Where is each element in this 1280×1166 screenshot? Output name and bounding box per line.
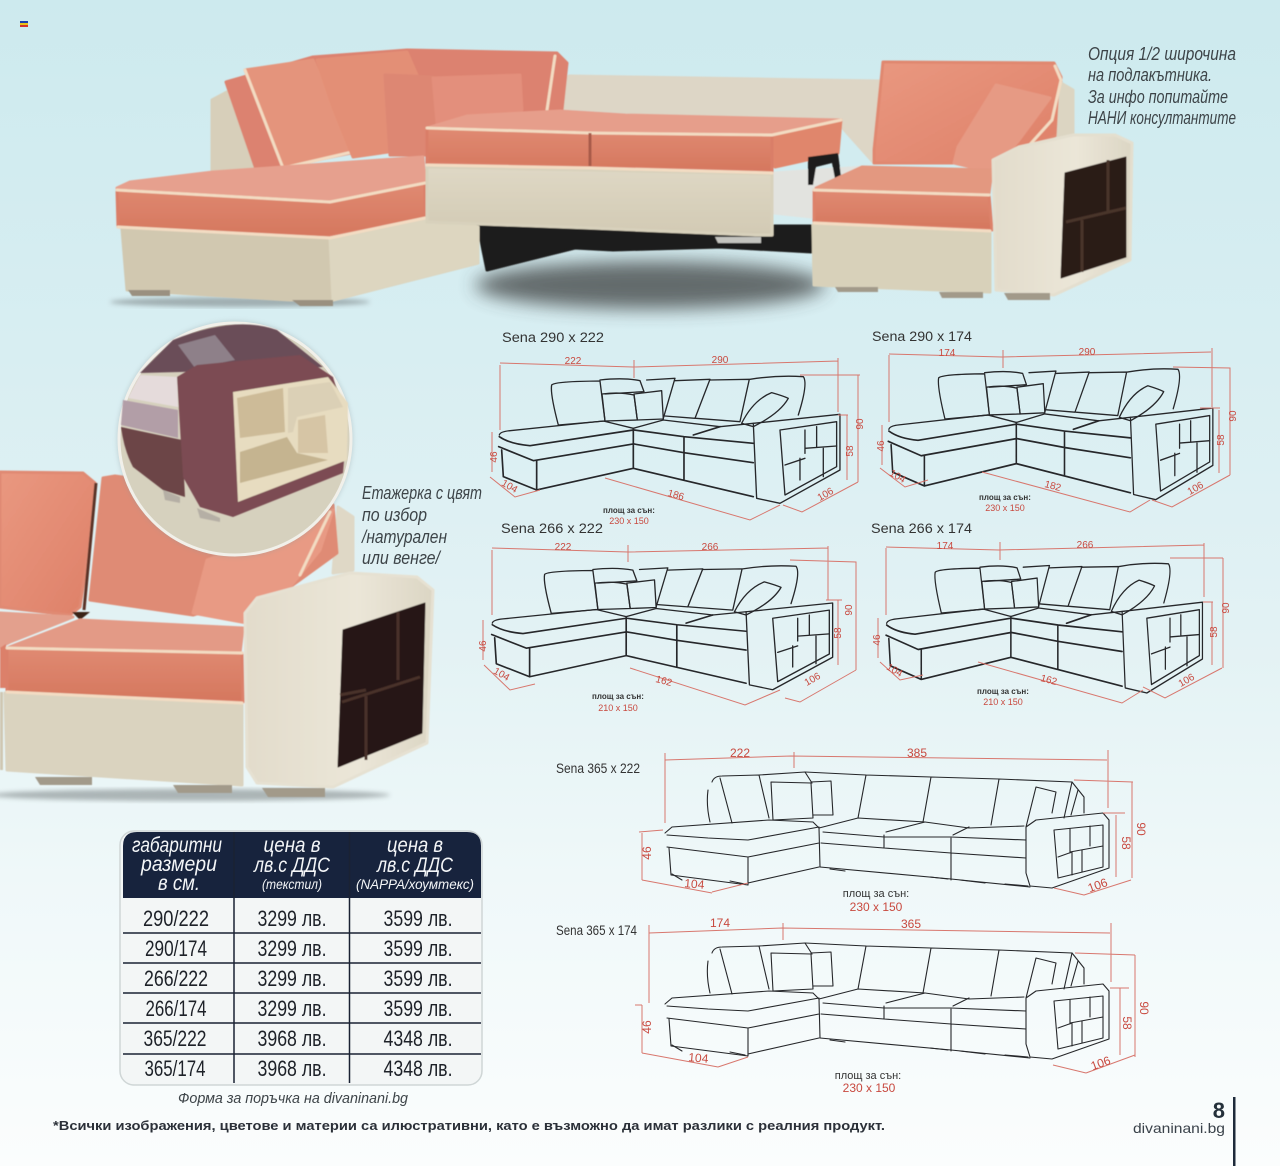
page marker bar (1233, 1097, 1236, 1166)
table header (123, 832, 481, 898)
diagram: Sena 365 x 174: 104 (688, 1050, 709, 1066)
diagram: Sena 266 x 174: 106 (1177, 672, 1197, 690)
diagram: Sena 266 x 174: Sena 266 x 174 (871, 521, 973, 536)
diagram: Sena 290 x 222: 230 x 150 (609, 516, 649, 526)
table header: (NAPPA/хоумтекс) (356, 876, 474, 892)
callout: shelf colour: Етажерка с цвят (362, 483, 482, 503)
diagram: Sena 365 x 222 (556, 746, 1148, 914)
inset circle: shelf colour detail (117, 321, 353, 557)
table rows: 266/174 (146, 996, 206, 1021)
table rows: 3299 лв. (258, 936, 326, 961)
diagram: Sena 290 x 174: Sena 290 x 174 (872, 329, 973, 344)
diagram: Sena 365 x 174: 58 (1120, 1016, 1134, 1030)
callout: armrest width option (1088, 44, 1236, 128)
diagram: Sena 290 x 174: 230 x 150 (985, 503, 1025, 513)
diagram: Sena 365 x 222: 90 (1134, 822, 1148, 836)
callout: armrest width option: НАНИ консултантите (1088, 108, 1236, 128)
diagram: Sena 290 x 222: площ за сън: (603, 506, 655, 515)
callout: shelf colour: по избор (362, 505, 427, 525)
diagram: Sena 290 x 174: 58 (1216, 434, 1227, 446)
diagram: Sena 365 x 174: 230 x 150 (843, 1081, 896, 1095)
diagram: Sena 365 x 174: площ за сън: (835, 1070, 901, 1082)
diagram: Sena 266 x 174: 90 (1221, 602, 1232, 614)
diagram: Sena 290 x 222: 58 (845, 445, 856, 457)
diagram: Sena 365 x 222: 46 (640, 846, 654, 860)
diagram: Sena 365 x 174: Sena 365 x 174 (556, 922, 637, 938)
diagram: Sena 365 x 174 (556, 916, 1151, 1095)
diagram: Sena 290 x 174: 174 (939, 348, 956, 359)
table header: лв.с ДДС (253, 854, 331, 877)
diagram: Sena 365 x 174: 174 (710, 916, 730, 930)
order form note: Форма за поръчка на divaninani.bg (178, 1090, 409, 1107)
callout: armrest width option: За инфо попитайте (1088, 87, 1228, 107)
diagram: Sena 266 x 222: 58 (833, 627, 844, 639)
table rows: 290/222 (143, 906, 209, 931)
diagram: Sena 365 x 222: площ за сън: (843, 888, 909, 900)
price table (120, 831, 482, 1085)
table header: габаритни (132, 834, 222, 857)
table header: (текстил) (262, 876, 322, 892)
table rows: 3599 лв. (384, 906, 452, 931)
table rows: 3299 лв. (258, 906, 326, 931)
diagram: Sena 290 x 174 (872, 329, 1239, 513)
footnote: *Всички изображения, цветове и материи са илюстративни, като е възможно да имат разлики с реалния продукт. (53, 1118, 885, 1133)
diagram: Sena 290 x 222: 106 (816, 486, 836, 504)
diagram: Sena 266 x 222 (478, 521, 856, 713)
table rows: 3968 лв. (258, 1026, 326, 1051)
diagram: Sena 365 x 222: 222 (730, 746, 750, 760)
diagram: Sena 365 x 174: 90 (1137, 1001, 1151, 1015)
table rows: 266/222 (144, 966, 208, 991)
table header: цена в (264, 834, 321, 857)
table rows: 3299 лв. (258, 996, 326, 1021)
callout: shelf colour: /натурален (360, 527, 447, 547)
table rows: 3599 лв. (384, 966, 452, 991)
website: divaninani.bg (1133, 1120, 1225, 1136)
diagram: Sena 266 x 174: 58 (1209, 626, 1220, 638)
diagram: Sena 266 x 174: 174 (937, 541, 954, 552)
diagram: Sena 290 x 174: 104 (887, 468, 908, 486)
diagram: Sena 266 x 222: 106 (803, 671, 823, 689)
diagram: Sena 290 x 222: 222 (565, 356, 582, 367)
table rows: 3599 лв. (384, 996, 452, 1021)
diagram: Sena 266 x 222: 222 (555, 542, 572, 553)
diagram: Sena 290 x 222: Sena 290 x 222 (502, 330, 604, 345)
table rows: 290/174 (145, 936, 207, 961)
icon: small colour flag (20, 21, 28, 27)
diagram: Sena 266 x 222: площ за сън: (592, 692, 644, 701)
diagram: Sena 266 x 174 (871, 521, 1232, 707)
diagram: Sena 266 x 174: 210 x 150 (983, 697, 1023, 707)
diagram: Sena 266 x 174: 46 (872, 634, 883, 646)
diagram: Sena 290 x 174: 182 (1043, 479, 1063, 494)
diagram: Sena 266 x 174: 266 (1077, 540, 1094, 551)
table rows: 3968 лв. (258, 1056, 326, 1081)
diagram: Sena 266 x 222: 104 (491, 666, 512, 684)
diagram: Sena 290 x 174: 106 (1186, 480, 1206, 498)
callout: armrest width option: Опция 1/2 широчина (1088, 44, 1236, 64)
diagram: Sena 266 x 222: 46 (478, 640, 489, 652)
table header: в см. (158, 872, 200, 895)
diagram: Sena 365 x 222: 58 (1119, 836, 1133, 850)
diagram: Sena 290 x 174: 46 (876, 440, 887, 452)
table rows: 365/222 (144, 1026, 206, 1051)
diagram: Sena 365 x 222: Sena 365 x 222 (556, 760, 640, 776)
diagram: Sena 290 x 222: 46 (489, 451, 500, 463)
diagram: Sena 365 x 222: 106 (1086, 875, 1110, 895)
diagram: Sena 266 x 222: Sena 266 x 222 (501, 521, 603, 536)
table rows: 365/174 (144, 1056, 206, 1081)
diagram: Sena 290 x 222: 186 (666, 488, 686, 503)
diagram: Sena 365 x 174: 365 (901, 917, 921, 931)
diagram: Sena 290 x 222: 104 (499, 478, 520, 496)
diagram: Sena 266 x 174: 104 (884, 662, 905, 680)
diagram: Sena 290 x 222 (489, 330, 866, 526)
table rows: 3299 лв. (258, 966, 326, 991)
table rows: 3599 лв. (384, 936, 452, 961)
main sofa photo (110, 50, 1132, 309)
diagram: Sena 266 x 222: 162 (654, 674, 674, 689)
table rows: 4348 лв. (384, 1026, 452, 1051)
diagram: Sena 290 x 222: 90 (855, 418, 866, 430)
diagram: Sena 266 x 222: 90 (844, 604, 855, 616)
diagram: Sena 266 x 222: 266 (702, 542, 719, 553)
callout: shelf colour (360, 483, 482, 568)
callout: shelf colour: или венге/ (362, 548, 442, 568)
diagram: Sena 365 x 222: 104 (684, 876, 705, 892)
second sofa detail photo (0, 472, 433, 801)
diagram: Sena 266 x 174: площ за сън: (977, 687, 1029, 696)
diagram: Sena 365 x 174: 106 (1089, 1053, 1113, 1073)
diagram: Sena 290 x 174: 90 (1228, 410, 1239, 422)
table header: лв.с ДДС (376, 854, 454, 877)
diagram: Sena 365 x 174: 46 (640, 1020, 654, 1034)
table header: цена в (387, 834, 443, 857)
table header: размери (140, 853, 217, 876)
diagram: Sena 266 x 222: 210 x 150 (598, 703, 638, 713)
diagram: Sena 365 x 222: 230 x 150 (850, 900, 903, 914)
table rows (143, 906, 452, 1081)
callout: armrest width option: на подлакътника. (1088, 65, 1212, 85)
table rows: 4348 лв. (384, 1056, 452, 1081)
diagram: Sena 290 x 174: площ за сън: (979, 493, 1031, 502)
diagram: Sena 266 x 174: 162 (1039, 673, 1059, 688)
diagram: Sena 290 x 174: 290 (1079, 347, 1096, 358)
diagram: Sena 290 x 222: 290 (712, 355, 729, 366)
diagram: Sena 365 x 222: 385 (907, 746, 927, 760)
page number: 8 (1213, 1098, 1225, 1123)
